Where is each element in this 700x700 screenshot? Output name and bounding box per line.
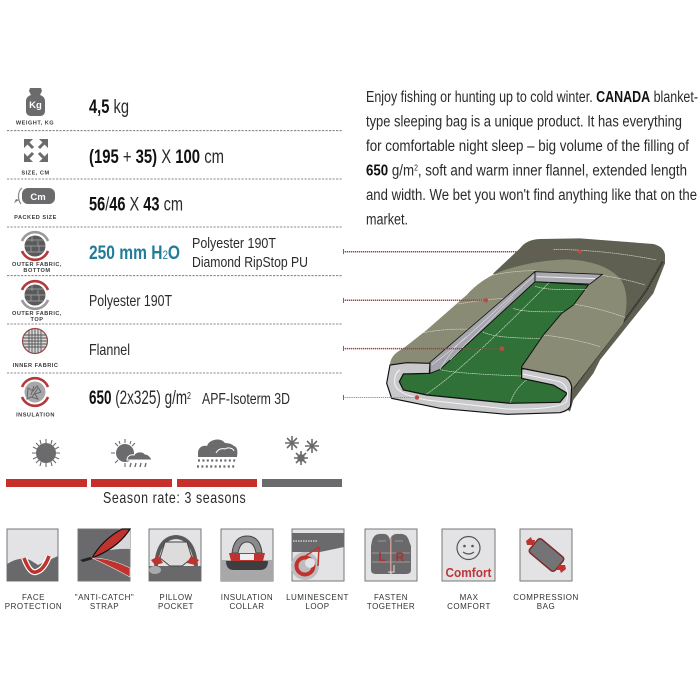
description paragraph: 2 — [414, 164, 418, 172]
label: anti-catch strap: STRAP — [90, 602, 119, 611]
callout: outer top — [343, 298, 488, 303]
spec row: packed size — [14, 188, 183, 221]
spec row: weight — [16, 88, 129, 126]
season bars — [6, 479, 342, 487]
value: bottom fabric type: Diamond RipStop PU — [192, 254, 308, 271]
value: inner fabric: Flannel — [89, 342, 130, 359]
icon: pillow pocket — [149, 529, 201, 581]
value: size: (195 + 35) X 100 cm — [89, 147, 224, 168]
caption: size: SIZE, CM — [21, 170, 50, 176]
icon: weight: Kg — [29, 100, 42, 111]
value: insulation weight: 2 — [187, 391, 191, 402]
label: pillow pocket: PILLOW — [159, 593, 193, 602]
icon: insulation collar — [221, 529, 273, 581]
caption: outer fabric top: OUTER FABRIC, — [12, 311, 62, 317]
caption: packed size: PACKED SIZE — [14, 215, 57, 221]
feature: fasten together — [365, 529, 417, 611]
callout: inner fabric — [343, 346, 504, 351]
label: anti-catch strap: "ANTI-CATCH" — [75, 593, 134, 602]
callout lines — [343, 249, 582, 400]
icon: anti-catch strap — [78, 529, 130, 581]
feature: pillow pocket — [149, 529, 201, 611]
label: max comfort: MAX — [460, 593, 478, 602]
label: face protection: PROTECTION — [5, 602, 62, 611]
icon: size arrows — [24, 139, 48, 162]
description paragraph — [366, 89, 698, 228]
inner flannel lining — [399, 282, 588, 403]
value: weight: 4,5 kg — [89, 97, 129, 118]
caption: outer fabric bottom: OUTER FABRIC, — [12, 262, 62, 268]
icon: sun with cloud — [111, 439, 152, 467]
icon: rain clouds — [197, 439, 237, 466]
value: insulation weight: 650 (2x325) g/m — [89, 388, 218, 409]
season rating — [6, 436, 342, 506]
bag top flap — [390, 259, 627, 390]
value: packed size: 56/46 X 43 cm — [89, 195, 183, 216]
label: compression bag: BAG — [537, 602, 555, 611]
sleeping bag illustration — [387, 238, 665, 414]
label: max comfort: COMFORT — [447, 602, 491, 611]
icon: compression bag — [520, 529, 572, 581]
value: bottom fabric: Polyester 190T — [192, 235, 276, 252]
icon: fasten together: R — [396, 550, 405, 564]
label: insulation collar: INSULATION — [221, 593, 273, 602]
caption: inner fabric: INNER FABRIC — [13, 363, 58, 369]
icon: fasten together: L — [378, 550, 386, 564]
feature: max comfort — [442, 529, 495, 611]
feature: luminescent loop — [286, 529, 349, 611]
label: fasten together: FASTEN — [374, 593, 408, 602]
icon: face protection — [7, 529, 58, 581]
icon: comfort smiley: Comfort — [446, 566, 492, 580]
season label: Season rate: 3 seasons — [103, 489, 246, 506]
label: insulation collar: COLLAR — [229, 602, 265, 611]
caption: outer fabric bottom: BOTTOM — [23, 268, 51, 274]
icon: insulation — [22, 378, 48, 406]
front cross-section — [387, 363, 572, 414]
icon: inner fabric — [22, 328, 48, 354]
spec row: outer fabric bottom — [12, 232, 308, 274]
insulation side wall — [430, 272, 535, 373]
label: face protection: FACE — [22, 593, 45, 602]
label: luminescent loop: LOOP — [305, 602, 330, 611]
value: top fabric: Polyester 190T — [89, 293, 172, 310]
callout: insulation — [343, 395, 419, 400]
feature: face protection — [5, 529, 62, 611]
icon: fasten together — [365, 529, 417, 581]
description paragraph: 650 g/m — [366, 162, 418, 180]
caption: outer fabric top: TOP — [31, 317, 43, 323]
label: fasten together: TOGETHER — [367, 602, 415, 611]
spec row: inner fabric — [13, 328, 130, 369]
icon: packed bag: Cm — [30, 192, 46, 203]
callout: outer bottom — [343, 249, 582, 254]
insulation back wall — [535, 272, 602, 284]
icon: snowflakes — [285, 436, 319, 465]
icon: outer fabric top — [22, 281, 48, 309]
label: luminescent loop: LUMINESCENT — [286, 593, 349, 602]
spec row: size — [21, 139, 224, 176]
icon: luminescent loop — [291, 529, 344, 581]
description paragraph: market. — [366, 212, 408, 228]
icon: outer fabric bottom — [22, 232, 48, 260]
icon: packed bag — [14, 188, 55, 204]
icon: sun — [32, 439, 60, 467]
feature: insulation collar — [221, 529, 273, 611]
value: insulation type: APF-Isoterm 3D — [202, 391, 290, 408]
label: pillow pocket: POCKET — [158, 602, 194, 611]
spec row: insulation — [16, 378, 290, 418]
spec row: outer fabric top — [12, 281, 172, 323]
caption: insulation: INSULATION — [16, 412, 55, 418]
bag back panel — [493, 238, 665, 412]
caption: weight: WEIGHT, KG — [16, 120, 54, 126]
description paragraph: Enjoy fishing or hunting up to cold winter. CANADA blanket- — [366, 89, 698, 106]
feature: anti-catch strap — [75, 529, 134, 611]
label: compression bag: COMPRESSION — [513, 593, 579, 602]
feature: compression bag — [513, 529, 579, 611]
value: waterproof rating: 250 mm H2O — [89, 243, 180, 264]
